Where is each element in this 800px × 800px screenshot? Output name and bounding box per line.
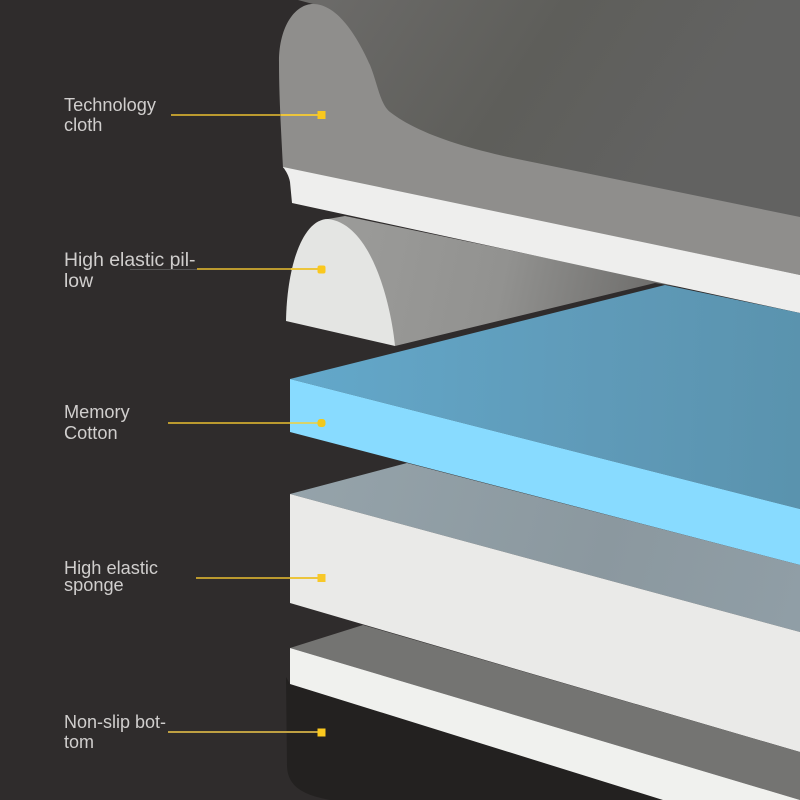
label: non-slip bottom xyxy=(64,712,326,752)
cloth white base xyxy=(283,167,800,313)
pillow front face xyxy=(286,219,395,346)
sponge top surface xyxy=(290,463,800,632)
cloth top surface xyxy=(298,0,800,222)
sponge front face xyxy=(290,494,800,752)
label: memory cotton: Cotton xyxy=(64,423,118,443)
label: technology cloth xyxy=(64,95,326,135)
layer: memory cotton xyxy=(290,285,800,565)
bottom white edge xyxy=(290,648,800,800)
bottom top surface xyxy=(290,625,800,800)
layer: non-slip bottom xyxy=(286,625,800,800)
label: high elastic pillow xyxy=(64,249,326,292)
label: non-slip bottom: tom xyxy=(64,732,94,752)
layer: technology cloth xyxy=(279,0,800,313)
memory top surface xyxy=(290,285,800,509)
pillow top surface xyxy=(328,216,700,346)
label: technology cloth: cloth xyxy=(64,115,102,135)
cloth front face xyxy=(279,4,800,275)
label: technology cloth: Technology xyxy=(64,95,157,115)
label: high elastic sponge: High elastic xyxy=(64,558,158,578)
label: high elastic pillow: High elastic pil- xyxy=(64,249,195,271)
label: high elastic sponge xyxy=(64,558,326,595)
label: high elastic sponge: sponge xyxy=(64,575,124,595)
layer: high elastic pillow xyxy=(286,216,700,346)
layer: high elastic sponge xyxy=(290,463,800,752)
label: high elastic pillow: low xyxy=(64,270,94,292)
label: non-slip bottom: Non-slip bot- xyxy=(64,712,166,732)
memory front face xyxy=(290,379,800,565)
label: memory cotton xyxy=(64,402,326,443)
label: memory cotton: Memory xyxy=(64,402,131,422)
dark base xyxy=(286,677,663,800)
